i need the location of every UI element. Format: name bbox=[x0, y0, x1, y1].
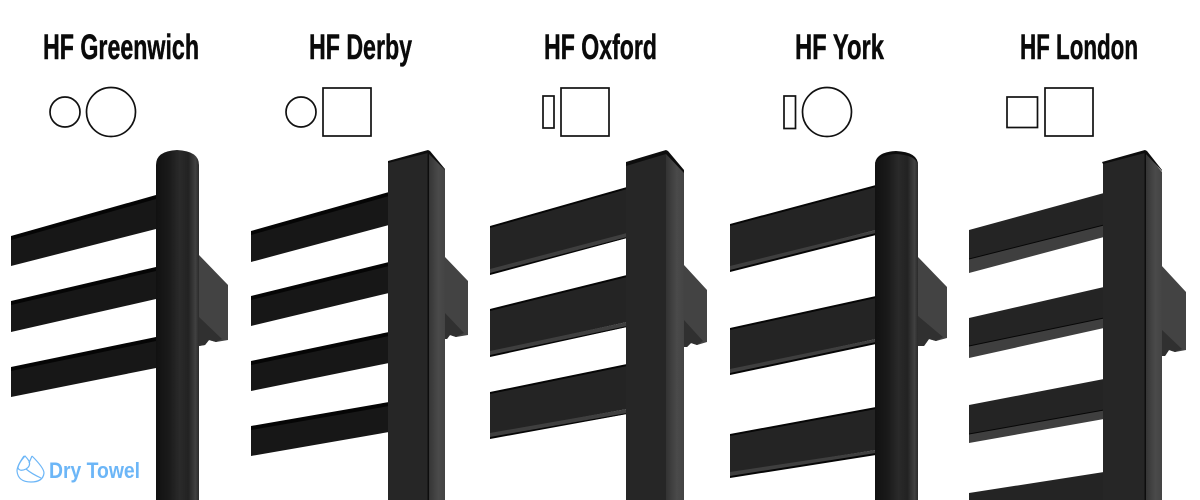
icon: square rail and square post profile bbox=[1007, 88, 1093, 136]
panel: HF Oxford bbox=[490, 28, 707, 500]
panel: HF York bbox=[730, 28, 947, 500]
brand name: Dry Towel bbox=[49, 458, 140, 483]
panel: HF Greenwich bbox=[11, 28, 228, 500]
logo: Dry Towel bbox=[17, 456, 140, 483]
icon: flat rail and round post profile bbox=[784, 88, 852, 136]
towel rail: round bars and square post bbox=[251, 150, 468, 500]
icon: round rail and square post profile bbox=[286, 88, 371, 136]
heading: HF Greenwich: HF Greenwich bbox=[43, 28, 199, 67]
panel: HF London bbox=[969, 28, 1186, 500]
heading: HF London: HF London bbox=[1020, 28, 1138, 67]
towel rail: round bars and round post bbox=[11, 150, 228, 500]
towel rail: flat bars and round post bbox=[730, 151, 947, 500]
icon: water drop bbox=[17, 456, 44, 482]
panel: HF Derby bbox=[251, 28, 468, 500]
icon: flat rail and square post profile bbox=[543, 88, 609, 136]
icon: round rail and round post profile bbox=[50, 88, 136, 136]
heading: HF York: HF York bbox=[795, 28, 884, 67]
towel rail: flat bars and square post bbox=[490, 150, 707, 500]
heading: HF Oxford: HF Oxford bbox=[544, 28, 657, 67]
heading: HF Derby: HF Derby bbox=[309, 28, 412, 67]
towel rail: rectangular bars and square post bbox=[969, 150, 1186, 500]
